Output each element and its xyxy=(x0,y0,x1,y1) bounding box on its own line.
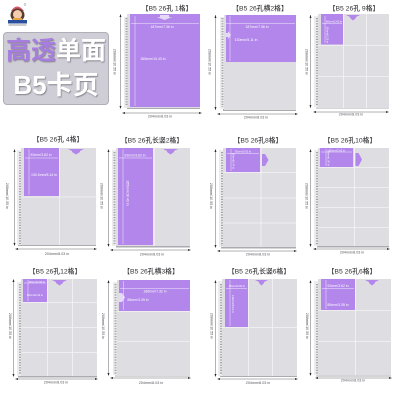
hero title card: 高透单面 xyxy=(6,37,106,65)
panel: B5 26孔 9格: 66mm/2.60 in xyxy=(326,20,343,24)
panel: B5 26孔 横2格 xyxy=(208,4,298,120)
panel: B5 26孔 8格: 【B5 26孔8格】 xyxy=(234,136,282,144)
panel: B5 26孔 1格: 【B5 26孔 1格】 xyxy=(142,4,192,12)
panel: B5 26孔 12格: 62mm/2.44 in xyxy=(27,293,44,297)
panel: B5 26孔 长竖2格: 204mm/8.03 in xyxy=(140,252,164,256)
panel: B5 26孔 横3格: 【B5 26孔横3格】 xyxy=(123,266,179,276)
panel: B5 26孔 8格: 62mm/2.44 in xyxy=(232,153,236,170)
panel: B5 26孔 8格 xyxy=(209,136,297,256)
panel: B5 26孔 横2格: 130mm/5.11 in xyxy=(235,38,257,42)
panel: B5 26孔 1格: 204mm/8.03 in xyxy=(148,114,172,118)
panel: B5 26孔 6格: 268mm/10.55 in xyxy=(305,313,309,339)
panel: B5 26孔 6格: 92mm/3.62 in xyxy=(327,284,349,288)
panel: B5 26孔 横3格 xyxy=(101,266,191,385)
panel: B5 26孔 横3格: 86mm/3.39 in xyxy=(127,298,149,302)
panel: B5 26孔 12格: 204mm/8.03 in xyxy=(44,380,68,384)
panel: B5 26孔 长竖2格: 【B5 26孔长竖2格】 xyxy=(121,136,183,144)
panel: B5 26孔 10格: 92mm/3.62 in xyxy=(329,148,346,152)
panel: B5 26孔 长竖6格: 130mm/5.12 in xyxy=(231,295,235,313)
panel: B5 26孔 9格 xyxy=(304,4,389,116)
panel: B5 26孔 10格: 【B5 26孔10格】 xyxy=(324,136,376,144)
panel: B5 26孔 长竖6格: 【B5 26孔长竖6格】 xyxy=(228,266,290,276)
panel: B5 26孔 10格: 268mm/10.55 in xyxy=(304,183,308,209)
panel: B5 26孔 9格: 【B5 26孔 9格】 xyxy=(329,4,379,12)
panel: B5 26孔 9格: 82mm/3.23 in xyxy=(326,27,330,44)
panel: B5 26孔 4格: 268mm/10.55 in xyxy=(5,183,9,209)
panel: B5 26孔 1格: 187mm/7.36 in xyxy=(150,25,174,29)
panel: B5 26孔 横3格: 204mm/8.03 in xyxy=(139,381,163,385)
panel: B5 26孔 横2格: 268mm/10.55 in xyxy=(208,49,212,75)
panel: B5 26孔 12格: 66mm/2.60 in xyxy=(29,280,46,284)
panel: B5 26孔 4格: 130.5mm/5.14 in xyxy=(31,173,57,177)
panel: B5 26孔 10格: 204mm/8.03 in xyxy=(340,250,364,254)
panel: B5 26孔 1格 xyxy=(112,4,202,118)
panel: B5 26孔 8格: 268mm/10.55 in xyxy=(209,183,213,209)
panel: B5 26孔 12格: 268mm/10.55 in xyxy=(8,313,12,339)
panel: B5 26孔 6格: 204mm/8.03 in xyxy=(341,378,365,382)
panel: B5 26孔 长竖2格: 265mm/10.43 in xyxy=(126,180,130,206)
hero title card: B5卡页 xyxy=(13,70,99,100)
panel: B5 26孔 长竖6格 xyxy=(210,266,298,385)
panel: B5 26孔 横2格: 204mm/8.03 in xyxy=(244,116,268,120)
panel: B5 26孔 长竖6格: 66mm/2.60 in xyxy=(229,284,246,288)
panel: B5 26孔 6格: 【B5 26孔6格】 xyxy=(328,266,376,276)
panel: B5 26孔 9格: 204mm/8.03 in xyxy=(339,112,363,116)
panel: B5 26孔 横3格: 268mm/10.55 in xyxy=(101,313,105,339)
panel: B5 26孔 12格: 【B5 26孔12格】 xyxy=(29,266,81,276)
panel: B5 26孔 12格 xyxy=(8,266,98,384)
panel: B5 26孔 1格: 265mm/10.43 in xyxy=(140,57,166,61)
panel: B5 26孔 8格: 92mm/3.62 in xyxy=(235,150,252,154)
panel: B5 26孔 1格: 268mm/10.55 in xyxy=(112,49,116,75)
panel: B5 26孔 4格 xyxy=(5,134,97,256)
panel: B5 26孔 10格: 50mm/1.97 in xyxy=(326,150,330,167)
panel: B5 26孔 长竖2格 xyxy=(100,136,191,256)
panel: B5 26孔 10格 xyxy=(304,136,390,254)
panel: B5 26孔 长竖2格: 92mm/3.62 in xyxy=(124,154,146,158)
panel: B5 26孔 8格: 204mm/8.03 in xyxy=(246,252,270,256)
panel: B5 26孔 横3格: 186mm/7.32 in xyxy=(143,290,167,294)
panel: B5 26孔 长竖6格: 204mm/8.03 in xyxy=(246,381,270,385)
panel: B5 26孔 4格: 204mm/8.03 in xyxy=(45,252,69,256)
panel: B5 26孔 6格 xyxy=(305,266,392,382)
panel: B5 26孔 6格: 85mm/3.35 in xyxy=(327,303,349,307)
panel: B5 26孔 长竖6格: 268mm/10.55 in xyxy=(210,313,214,339)
panel: B5 26孔 横2格: 【B5 26孔横2格】 xyxy=(232,4,288,12)
panel: B5 26孔 横2格: 187mm/7.36 in xyxy=(245,25,269,29)
hero title card xyxy=(3,32,109,105)
panel: B5 26孔 9格: 268mm/10.55 in xyxy=(304,49,308,75)
panel: B5 26孔 长竖2格: 268mm/10.55 in xyxy=(100,183,104,209)
panel: B5 26孔 4格: 92mm/3.62 in xyxy=(30,153,52,157)
panel: B5 26孔 4格: 【B5 26孔 4格】 xyxy=(33,134,83,144)
